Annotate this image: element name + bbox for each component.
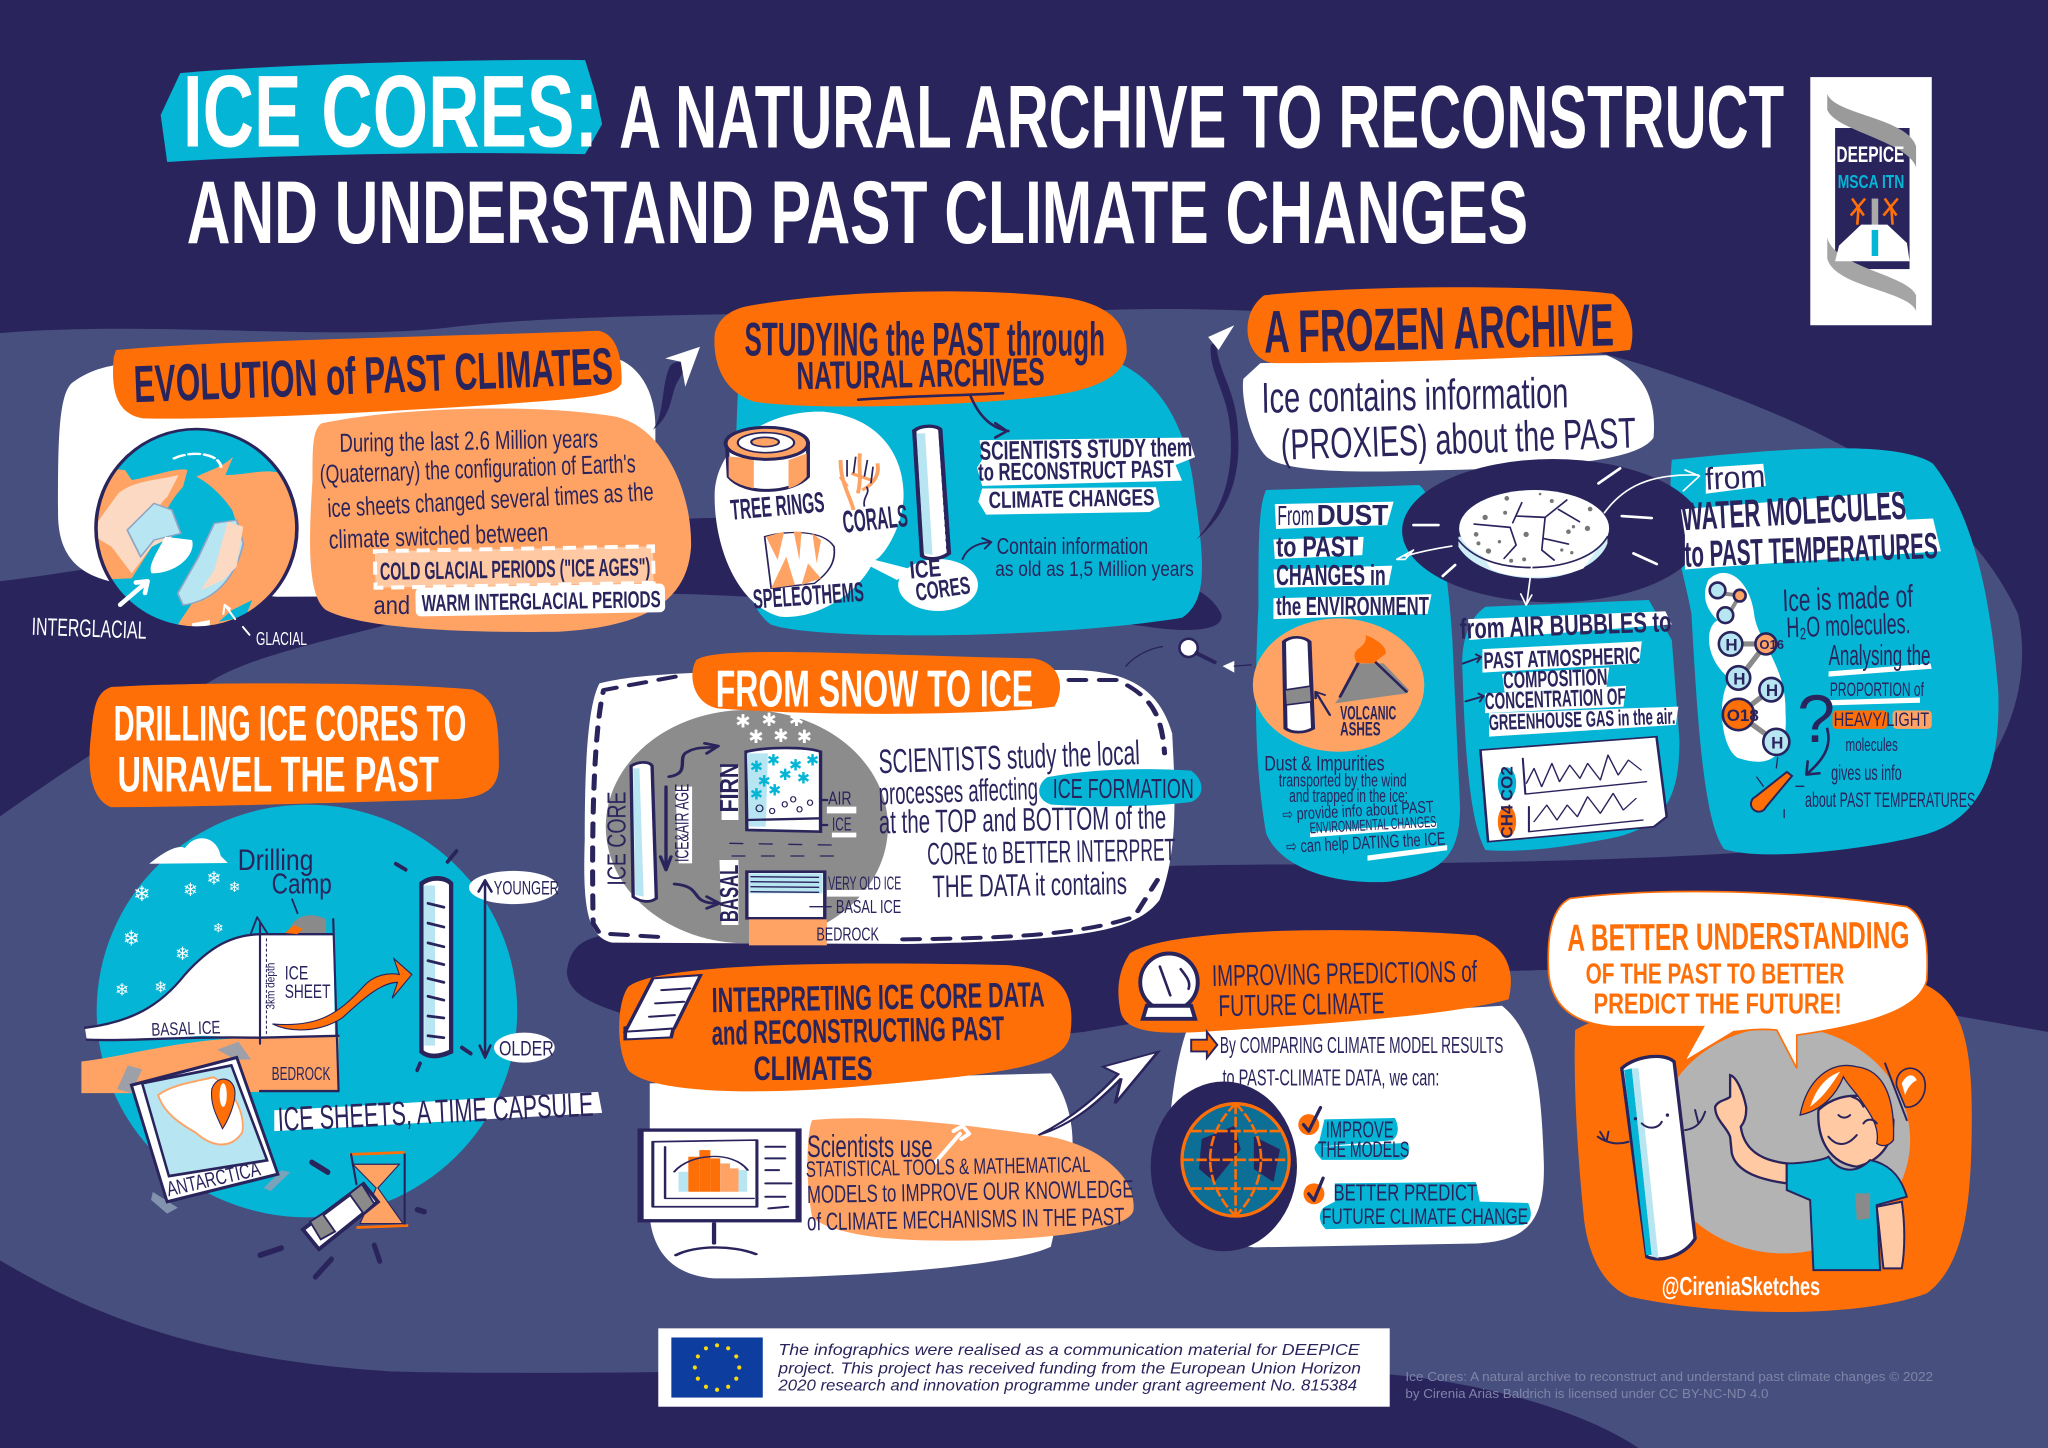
EU flag [671,1337,763,1398]
callout: contain information [963,533,1194,581]
diagram: ice core layers: AIR [828,788,852,809]
icon: crystal ball [1140,953,1198,1019]
text: dust and impurities: ⇨ provide info about PAST [1282,797,1434,824]
panel: a better understanding [1548,892,1972,1312]
heading: interpreting [619,963,1071,1091]
funding acknowledgement [658,1328,1390,1407]
licence note: Ice Cores: A natural archive to reconstruct and understand past climate changes © 2022 [1405,1369,1933,1384]
ice sheet cross-section: ❄ [123,927,140,951]
highlight: cold glacial periods: COLD GLACIAL PERIODS ("ICE AGES") [380,554,651,586]
heading strips: from dust: CHANGES in [1276,560,1386,592]
heading: drilling ice cores: DRILLING ICE CORES TO [114,696,466,752]
white panel backing [1169,1006,1544,1247]
ice core with age arrow: YOUNGER [494,878,559,900]
diagram: ice core layers: ✱ [767,750,780,769]
diagram: ice core layers: VERY OLD ICE [828,872,901,893]
label: glacial: GLACIAL [256,628,307,649]
icon: thermometer [1751,758,1804,818]
heading strips: water molecules [1681,459,1941,575]
peach text blob [310,408,691,632]
label: volcanic ashes [1340,703,1396,740]
volcanic ash illustration [1253,618,1424,752]
line charts: CO2 and CH4 [1480,737,1667,842]
label: interglacial [31,581,148,645]
callout: contain information: as old as 1,5 Million years [995,558,1194,581]
text: dust and impurities: and trapped in the ice: [1289,785,1408,806]
labels: archive names: ICE [909,555,942,585]
heading: from snow to ice: FROM SNOW TO ICE [716,661,1033,719]
panel: air bubbles [1459,600,1679,851]
ice sheet cross-section: ❄ [213,922,224,937]
magnifier: dust to snow link [1126,639,1251,673]
title line 1: ICE CORES: [183,54,598,168]
diagram: ice core layers [602,710,901,945]
licence note: by Cirenia Arias Baldrich is licensed under CC BY-NC-ND 4.0 [1405,1386,1768,1401]
DEEPICE logo: MSCA ITN [1838,171,1904,192]
highlight: warm interglacial periods [374,583,665,620]
callout: scientists study them: SCIENTISTS STUDY them [979,432,1193,466]
icon: water molecules: O16 [1759,637,1784,652]
arrow: evolution to studying [653,347,700,430]
icon: water molecules: O18 [1727,706,1759,725]
diagram: ice core layers: ✱ [797,769,810,788]
proxies bubble: (PROXIES) about the PAST [1280,409,1637,470]
DEEPICE logo [1810,77,1932,325]
cyan panel backing [736,359,1202,635]
checklist: better predict [1304,1178,1531,1229]
diagram: ice core layers: ✱ [735,712,751,733]
text: dust and impurities: transported by the wind [1279,769,1407,790]
diagram: ice core layers: ✱ [778,765,792,784]
funding text [777,1342,1361,1394]
peach text blob: (Quaternary) the configuration of Earth's [319,448,636,489]
callout: scientists study them: CLIMATE CHANGES [988,484,1155,513]
heading: drilling ice cores: UNRAVEL THE PAST [118,747,439,803]
ice sheet cross-section: ❄ [183,880,198,901]
checklist: improve the models: THE MODELS [1318,1137,1409,1162]
funding text: The infographics were realised as a communication material for DEEPICE [778,1342,1360,1359]
heading: from snow to ice [692,652,1060,719]
text: dust and impurities [1264,753,1447,861]
text: ice is made of [1782,579,1979,812]
icon: speleothems [765,532,834,588]
heading strips: from dust: From [1277,500,1314,531]
peach text blob: climate switched between [328,517,549,555]
icon: ice core [914,426,949,559]
text: ice is made of: gives us info [1831,762,1902,785]
text: scientists study local processes: THE DATA it contains [932,866,1127,904]
line charts: CO2 and CH4: CO2 [1497,766,1516,801]
heading: interpreting: INTERPRETING ICE CORE DATA [711,975,1045,1020]
text: ice is made of: PROPORTION of [1830,679,1924,701]
text: air bubbles: from AIR BUBBLES to [1459,606,1672,646]
text: scientists study local processes [878,734,1201,904]
handle: @CireniaSketches: @CireniaSketches [1662,1271,1820,1301]
text: ice is made of: molecules [1846,734,1898,755]
label: glacial [223,605,307,649]
diagram: ice core layers: BASAL [714,865,744,922]
text: ice is made of: HEAVY/LIGHT [1834,709,1929,731]
ice core with age arrow: OLDER [499,1037,554,1060]
heading: a frozen archive [1247,287,1632,366]
ice sheet cross-section: ❄ [115,980,129,1000]
title highlight [161,60,602,162]
text: scientists study local processes: at the TOP and BOTTOM of the [878,798,1166,840]
ice sheet cross-section: ❄ [206,868,222,889]
heading: evolution: EVOLUTION of PAST CLIMATES [133,338,614,414]
panel: evolution of past climates [31,331,691,649]
label: volcanic ashes: VOLCANIC [1340,703,1396,725]
diagram: ice core layers: BASAL ICE [836,896,901,917]
label: volcanic ashes: ASHES [1340,718,1381,740]
highlight: warm interglacial periods: WARM INTERGLACIAL PERIODS [422,586,661,616]
diagram: ice core layers: ✱ [797,727,812,748]
line charts: CO2 and CH4: CH4 [1497,804,1516,839]
ice sheet cross-section [81,838,412,1093]
text: dust and impurities: ENVIRONMENTAL CHANGES [1309,814,1437,837]
ice sheet cross-section: BEDROCK [272,1063,330,1084]
diagram: ice core layers: ✱ [773,726,789,747]
text: air bubbles [1459,606,1678,737]
text: ice is made of: Analysing the [1829,640,1930,672]
callout: scientists study them: to RECONSTRUCT PAST [978,456,1174,487]
heading strips: from dust: DUST [1317,500,1389,532]
ice sample disc [1402,459,1703,602]
diagram: ice core layers: ✱ [750,757,763,776]
orange panel backing [1575,980,1972,1312]
heading: studying the past [714,291,1127,406]
diagram: ice core layers: ICE CORE [602,792,632,886]
ice sheet cross-section: ❄ [154,978,167,997]
diagram: ice core layers: FIRN [714,763,744,812]
DEEPICE logo: DEEPICE [1836,142,1904,167]
icon: water molecules: H [1771,733,1783,752]
funding text: project. This project has received funding from the European Union Horizon [777,1360,1361,1377]
text: by comparing: to PAST-CLIMATE DATA, we can: [1223,1064,1439,1090]
diagram: ice core layers: ✱ [789,756,802,775]
white panel backing [58,360,655,597]
heading: improving predictions [1118,930,1511,1033]
title line 1 [183,54,1784,168]
highlight: warm interglacial periods: and [374,590,410,620]
ice sheet cross-section: Camp [272,868,332,900]
panel: water molecules content [1681,459,1979,818]
heading strips: from dust: to PAST [1276,531,1359,563]
heading strips: from dust: the ENVIRONMENT [1276,591,1429,621]
diagram: ice core layers: ICE&AIR AGE [671,784,693,862]
icon: tree rings [726,427,808,490]
text: by comparing: By COMPARING CLIMATE MODEL RESULTS [1220,1032,1503,1058]
heading: evolution [113,331,622,419]
heading strips: from dust [1273,500,1432,621]
label: interglacial: INTERGLACIAL [31,614,147,645]
ice sheet cross-section: ICE [285,963,308,985]
heading: a frozen archive: A FROZEN ARCHIVE [1263,291,1615,366]
panel: from snow to ice [584,652,1201,945]
ribbon: ice sheets, a time capsule: ICE SHEETS, A TIME CAPSULE [277,1086,594,1139]
heading: drilling ice cores [90,683,499,807]
ice core with age arrow [421,871,559,1063]
labels: archive names: CORES [914,572,972,607]
icon: hourglass and core [260,1152,424,1277]
archive examples bubble [715,412,978,617]
labels: archive names: TREE RINGS [729,487,826,527]
text: ice is made of: Ice is made of [1782,579,1914,618]
title [161,54,1784,262]
diagram: ice core layers: ✱ [750,784,763,803]
text: air bubbles: PAST ATMOSPHERIC [1483,642,1641,674]
person character [1715,1063,1925,1270]
ice sheet cross-section: 3km depth [264,963,277,1010]
text: scientists study local processes: ICE FORMATION [1053,773,1194,804]
text: air bubbles: CONCENTRATION OF [1484,683,1626,714]
icon: water molecules: H [1766,681,1778,700]
panel: improving predictions [1118,930,1544,1251]
panel: natural archives [714,291,1202,635]
icon: water molecules [1705,573,1789,762]
ice sheet cross-section: Drilling [238,844,313,877]
heading: interpreting: CLIMATES [754,1050,872,1088]
heading strips: water molecules: from [1704,459,1766,497]
text: by comparing [1191,1032,1503,1090]
diagram: ice core layers: ✱ [789,710,804,731]
heading: studying the past: STUDYING the PAST through [744,312,1105,365]
speech bubble [1548,892,1927,1068]
callout: contain information: Contain information [997,533,1148,559]
ice core character [1598,1056,1705,1259]
diagram: ice core layers: BEDROCK [816,923,879,944]
panel: water molecules backing [1671,448,1999,854]
diagram: ice core layers: ICE [832,814,852,835]
checklist: improve the models [1298,1108,1409,1162]
sparkle marks [396,851,471,1070]
icon: corals [841,453,878,510]
icon: water molecules: H [1725,635,1738,654]
peach text blob: During the last 2.6 Million years [339,423,598,458]
text: dust and impurities: Dust & Impurities [1264,753,1384,776]
panel: interpreting ice core data [619,963,1158,1278]
diagram: ice core layers: ✱ [806,750,819,769]
text: scientists study local processes: CORE to BETTER INTERPRET [927,832,1176,872]
arrow: interpreting to predictions [1039,1052,1158,1135]
icon: books [625,975,701,1039]
checklist: better predict: BETTER PREDICT [1334,1179,1477,1205]
text: air bubbles: COMPOSITION [1503,664,1608,693]
checklist: better predict: FUTURE CLIMATE CHANGE [1322,1204,1528,1229]
peach text blob: of CLIMATE MECHANISMS IN THE PAST [807,1204,1125,1236]
text: air bubbles: GREENHOUSE GAS in the air. [1488,704,1676,735]
text: a better understanding: OF THE PAST TO BETTER [1586,959,1844,991]
ribbon: ice sheets, a time capsule [274,1086,602,1139]
diagram: ice core layers: ✱ [758,771,771,790]
ice sheet cross-section: BASAL ICE [151,1016,221,1040]
ice sheet cross-section: ❄ [229,880,241,896]
heading: studying the past: NATURAL ARCHIVES [796,351,1045,398]
peach text blob: STATISTICAL TOOLS & MATHEMATICAL [806,1152,1091,1182]
peach text blob: MODELS to IMPROVE OUR KNOWLEDGE [807,1176,1134,1209]
text: scientists study local processes: processes affecting [878,771,1039,812]
text: scientists study local processes: SCIENTISTS study the local [878,734,1140,781]
funding text: 2020 research and innovation programme under grant agreement No. 815384 [777,1377,1357,1394]
grey spotlight circle [1657,1027,1910,1253]
icon: globe [1151,1081,1297,1251]
labels: archive names [729,487,972,615]
proxies bubble: Ice contains information [1261,369,1569,423]
labels: archive names: SPELEOTHEMS [752,576,865,615]
icon: monitor with chart [641,1130,799,1255]
callout: scientists study them [970,396,1195,515]
text: a better understanding: PREDICT THE FUTURE! [1593,989,1842,1021]
panel: drilling ice cores [81,683,602,1277]
ice sheet cross-section: ❄ [175,944,190,965]
licence note [1405,1369,1933,1401]
panel: dust [1253,485,1460,882]
polaroid: antarctica: ANTARCTICA [164,1157,263,1201]
white panel backing [650,1073,1073,1278]
diagram: ice core layers: ✱ [748,727,764,748]
heading: improving predictions: IMPROVING PREDICTIONS of [1212,956,1478,993]
text: a better understanding [1567,915,1910,1021]
arrows from ice disc [1397,470,1699,605]
heading: interpreting: and RECONSTRUCTING PAST [711,1010,1005,1053]
highlight: cold glacial periods [375,546,654,588]
globe [94,428,299,626]
icon: water molecules: H [1733,669,1745,688]
peach text blob [806,1118,1134,1241]
icon: question mark: ? [1797,682,1835,757]
arrow: archives to frozen archive [1196,325,1238,539]
panel: a frozen archive [1243,287,1999,882]
polaroid: antarctica [117,1042,290,1214]
text: ice is made of: H₂O molecules. [1786,608,1911,644]
diagram: ice core layers: ✱ [761,710,777,731]
ice sheet cross-section: ❄ [133,882,151,906]
text: dust and impurities: ⇨ can help DATING the ICE [1286,828,1446,857]
ice sheet cross-section: SHEET [285,981,330,1003]
heading: improving predictions: FUTURE CLIMATE [1218,987,1385,1023]
checklist: improve the models: IMPROVE [1326,1117,1394,1143]
cyan time capsule circle [97,805,517,1217]
labels: archive names: CORALS [841,498,909,540]
peach text blob: ice sheets changed several times as the [327,476,654,523]
diagram: ice core layers: ✱ [768,780,781,799]
peach text blob: Scientists use [807,1129,933,1164]
proxies bubble [1243,355,1654,472]
